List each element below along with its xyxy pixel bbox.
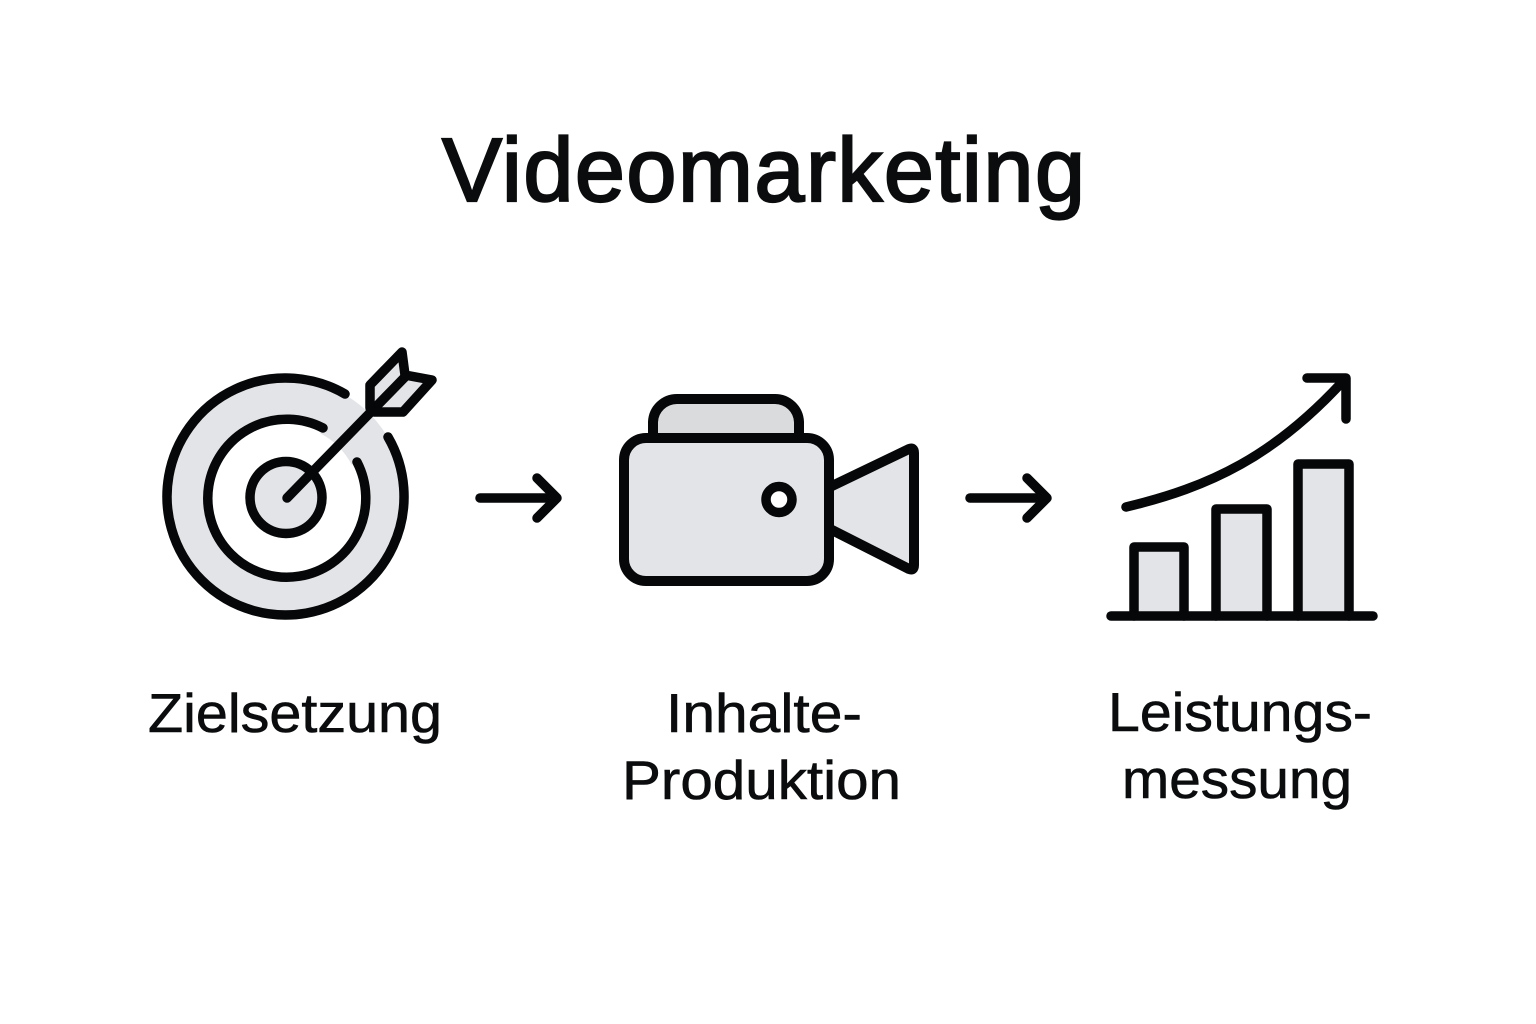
icon: video camera <box>624 399 914 581</box>
arrowhead: goal to production <box>537 478 557 518</box>
label: Leistungsmessung <box>1108 681 1372 810</box>
label: Leistungsmessung: Leistungs- <box>1108 681 1372 743</box>
bar 2 <box>1216 509 1267 616</box>
label: Zielsetzung: Zielsetzung <box>148 682 442 744</box>
label: Leistungsmessung: messung <box>1122 748 1352 810</box>
bar 3 <box>1298 464 1349 616</box>
baseline <box>1111 611 1373 621</box>
arrow: goal to production <box>480 493 556 503</box>
label: Inhalte-Produktion: Produktion <box>622 749 901 811</box>
title: Videomarketing <box>442 121 1085 221</box>
arrow: production to measurement <box>970 493 1046 503</box>
bar 1 <box>1134 547 1184 616</box>
label: Inhalte-Produktion: Inhalte- <box>666 682 862 744</box>
arrowhead: production to measurement <box>1027 478 1047 518</box>
icon: target with arrow <box>167 352 432 615</box>
icon: growth bar chart <box>1111 378 1373 616</box>
label: Inhalte-Produktion <box>622 682 901 811</box>
trend arrow <box>1126 378 1346 507</box>
